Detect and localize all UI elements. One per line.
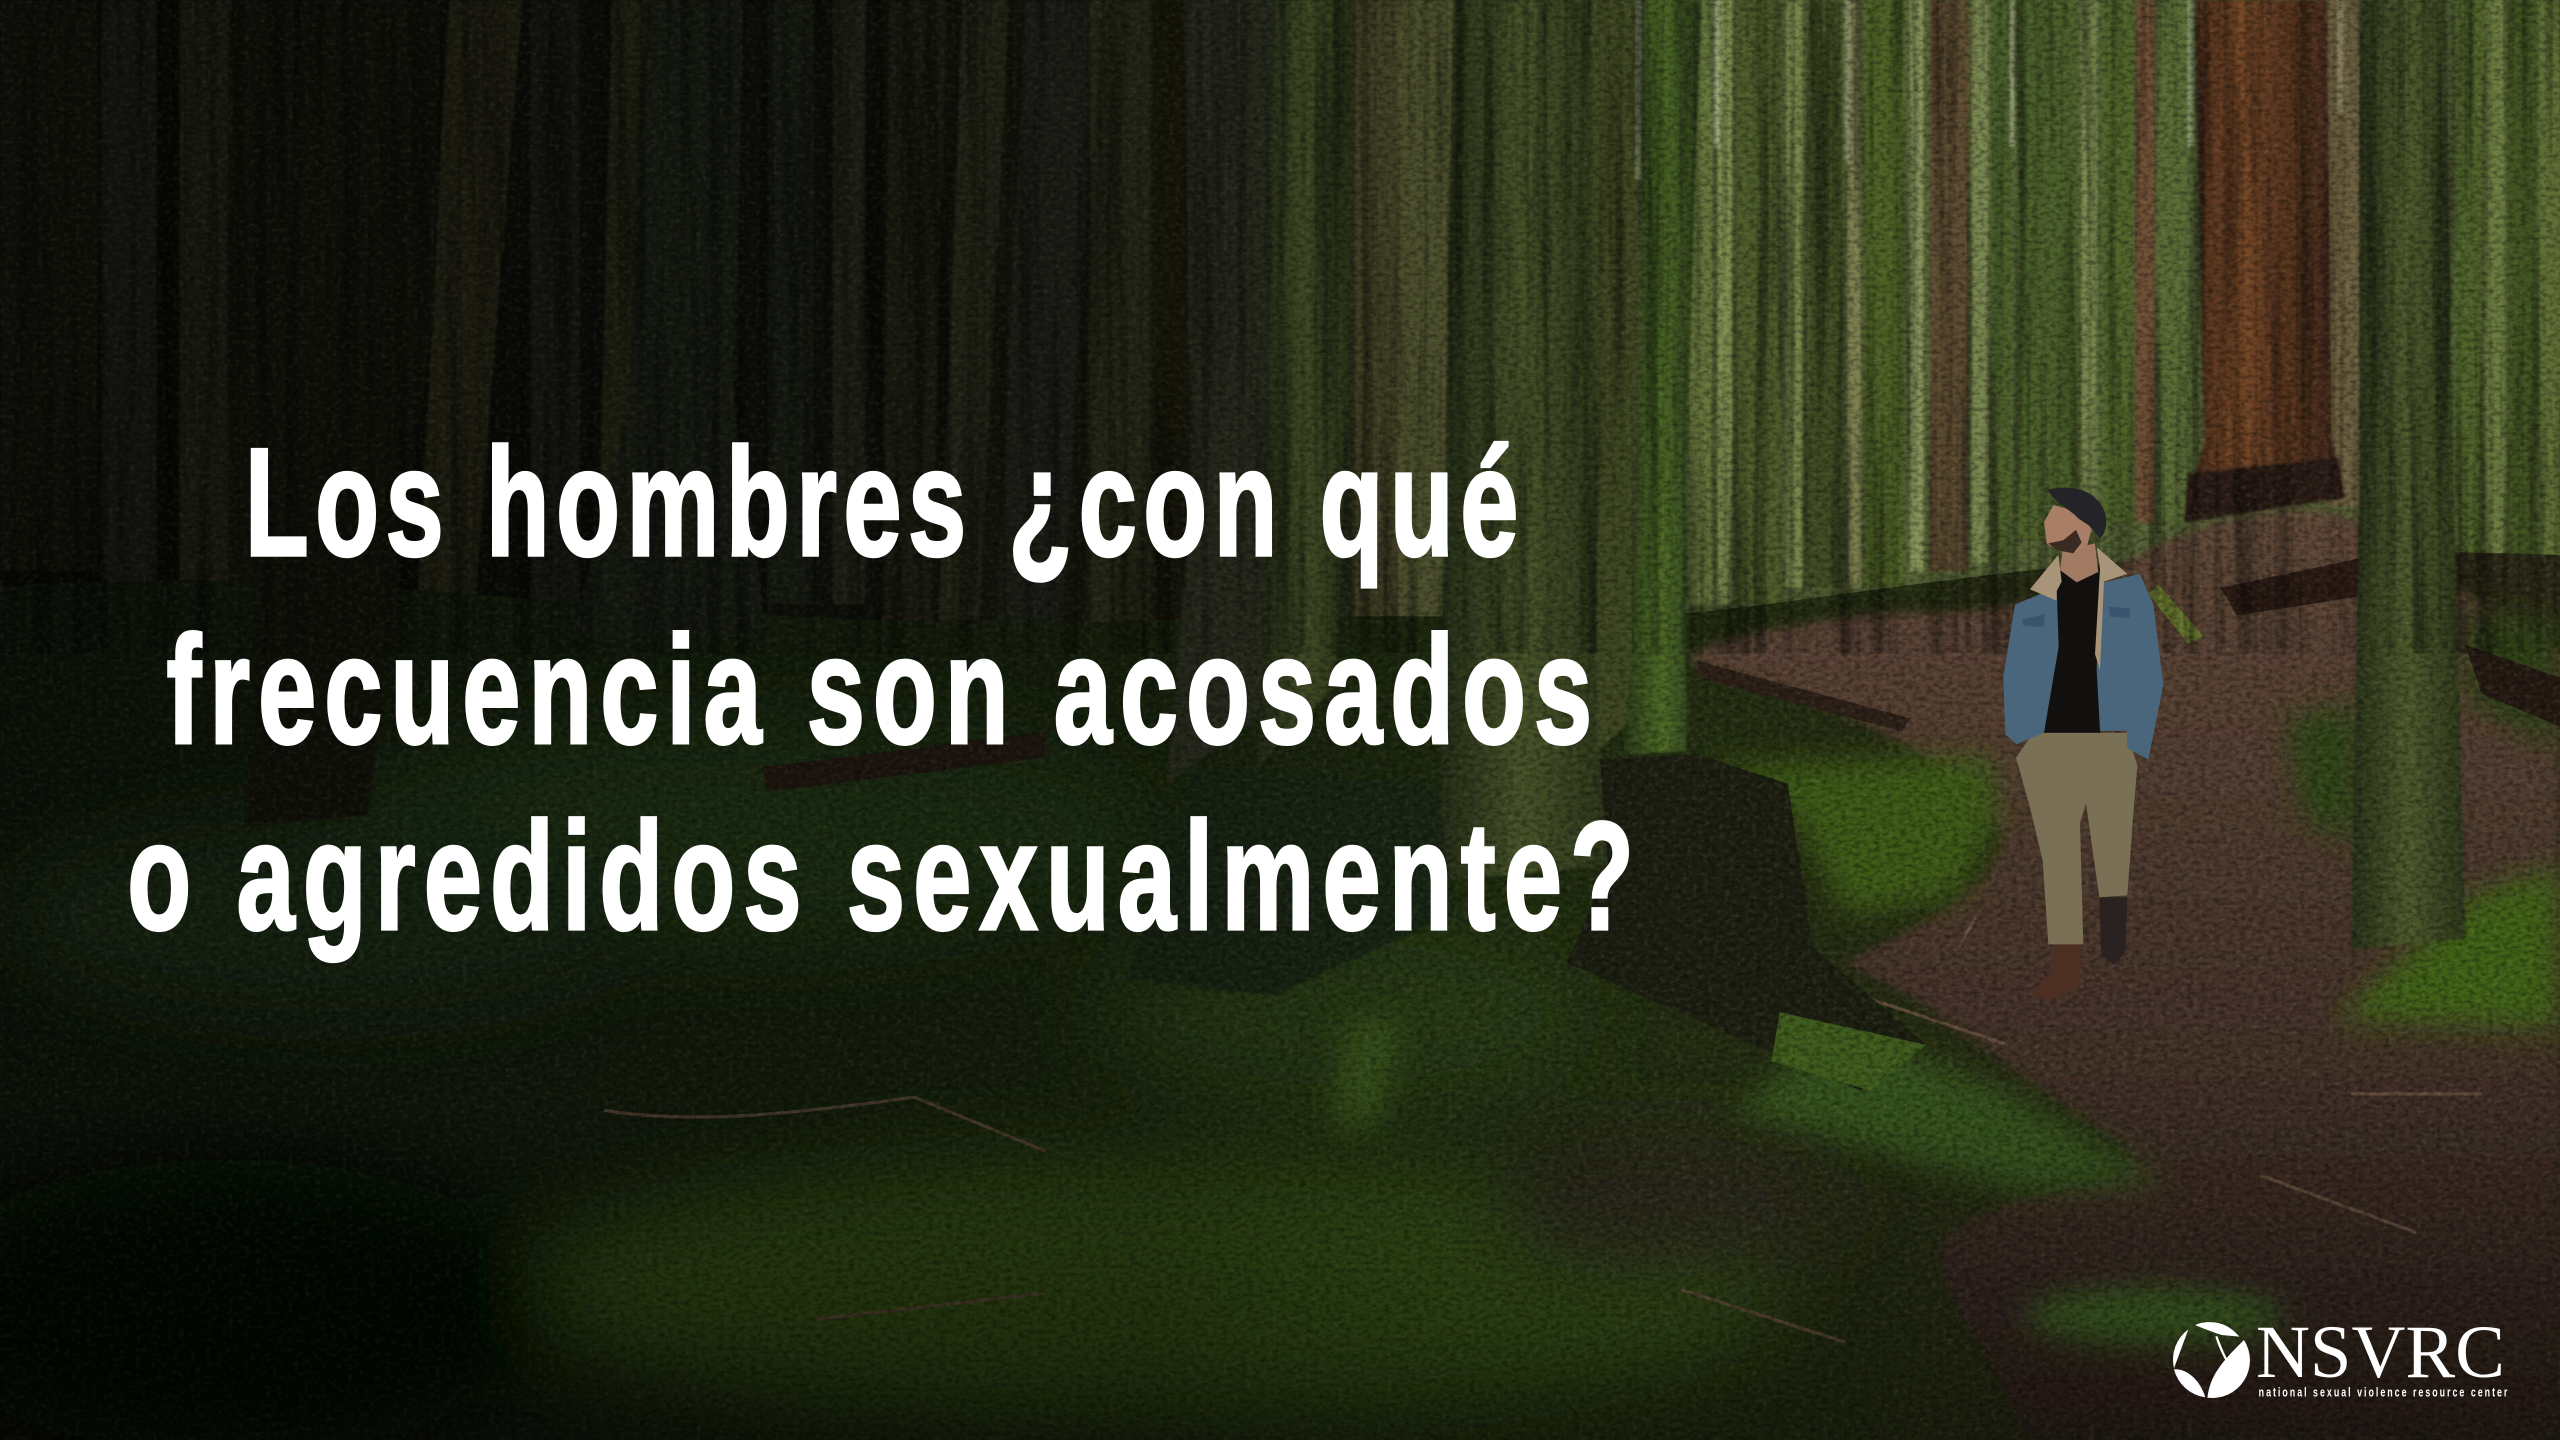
title — [127, 416, 1634, 962]
t-shirt — [2042, 568, 2101, 733]
trousers — [2016, 733, 2137, 944]
NSVRC logo — [2173, 1311, 2508, 1400]
distant tree stripes — [1633, 0, 2560, 604]
title line 3: o agredidos sexualmente? — [127, 790, 1634, 962]
head — [2044, 505, 2092, 553]
logo wordmark: NSVRC — [2256, 1311, 2505, 1394]
moss glow — [0, 718, 1845, 1440]
boots — [2031, 897, 2127, 1001]
forest floor — [0, 552, 2560, 1440]
logo emblem — [2173, 1322, 2250, 1398]
stump — [1567, 754, 1927, 1091]
man walking — [2003, 488, 2163, 1001]
tree trunks, foreground — [245, 0, 2465, 996]
neck and collar — [2060, 543, 2098, 582]
dark trees, left side — [0, 0, 1456, 653]
jacket — [2003, 574, 2163, 760]
title line 1: Los hombres ¿con qué — [245, 416, 1518, 588]
twigs on ground — [604, 918, 2482, 1342]
logo tagline: national sexual violence resource center — [2259, 1386, 2508, 1400]
title line 2: frecuencia son acosados — [167, 604, 1592, 776]
bark streaks — [0, 0, 2560, 653]
forest path — [1688, 510, 2560, 1440]
cap — [2047, 488, 2106, 539]
logs and moss banks — [1331, 604, 2560, 1345]
